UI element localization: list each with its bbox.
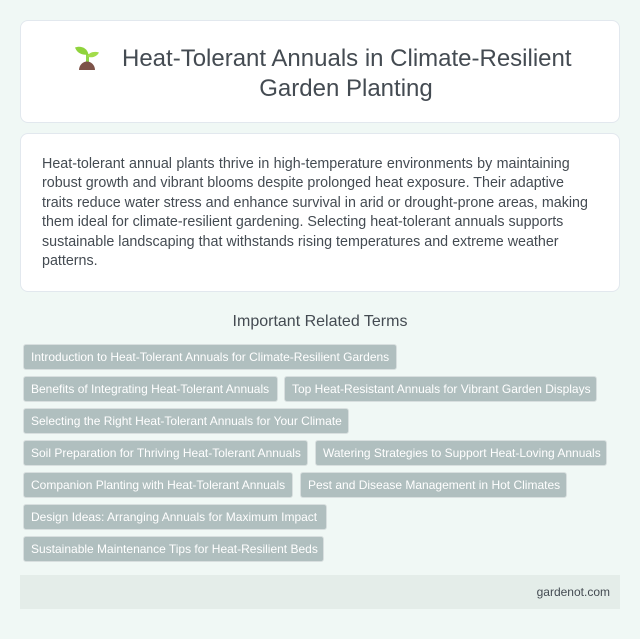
tag: [300, 472, 567, 498]
tag: Companion Planting with Heat-Tolerant Annuals: [31, 478, 285, 492]
heading: title: Garden Planting: [259, 75, 433, 102]
panel: title card: [20, 20, 620, 123]
text block: description: traits reduce water stress and enhance survival in arid or drought-prone areas, making: [42, 195, 588, 211]
tag: [315, 440, 607, 466]
tag: [23, 504, 327, 530]
tag: Top Heat-Resistant Annuals for Vibrant Garden Displays: [292, 382, 591, 396]
tag: [284, 376, 597, 402]
footer bar: [20, 575, 620, 609]
heading: title: [122, 45, 572, 102]
tag: Introduction to Heat-Tolerant Annuals for Climate-Resilient Gardens: [31, 350, 389, 364]
tag: [23, 344, 397, 370]
tag: Watering Strategies to Support Heat-Loving Annuals: [323, 446, 601, 460]
tag: Soil Preparation for Thriving Heat-Tolerant Annuals: [31, 446, 301, 460]
text block: description: Heat-tolerant annual plants thrive in high-temperature environments by maintaining: [42, 156, 570, 172]
panel: description card: [20, 133, 620, 292]
footer text: gardenot.com: [537, 585, 610, 599]
heading: title: Heat-Tolerant Annuals in Climate-Resilient: [122, 45, 572, 72]
icon: seedling: [75, 46, 99, 70]
text block: description: sustainable landscaping that withstands rising temperatures and extreme weather: [42, 234, 559, 250]
heading: Important Related Terms: Important Related Terms: [233, 313, 407, 330]
tag: Sustainable Maintenance Tips for Heat-Resilient Beds: [31, 542, 318, 556]
tag: [23, 408, 349, 434]
text block: description: robust growth and vibrant blooms despite prolonged heat exposure. Their adaptive: [42, 175, 564, 191]
text block: description: them ideal for climate-resilient gardening. Selecting heat-tolerant annuals supports: [42, 214, 563, 230]
text block: description: patterns.: [42, 253, 98, 269]
tag: Benefits of Integrating Heat-Tolerant Annuals: [31, 382, 269, 396]
tag: [23, 376, 278, 402]
tag: Pest and Disease Management in Hot Climates: [308, 478, 560, 492]
panel: related term tags: [23, 344, 607, 562]
tag: Design Ideas: Arranging Annuals for Maximum Impact: [31, 510, 317, 524]
tag: Selecting the Right Heat-Tolerant Annuals for Your Climate: [31, 414, 342, 428]
tag: [23, 440, 308, 466]
tag: [23, 472, 293, 498]
text block: description: [42, 156, 588, 269]
tag: [23, 536, 324, 562]
